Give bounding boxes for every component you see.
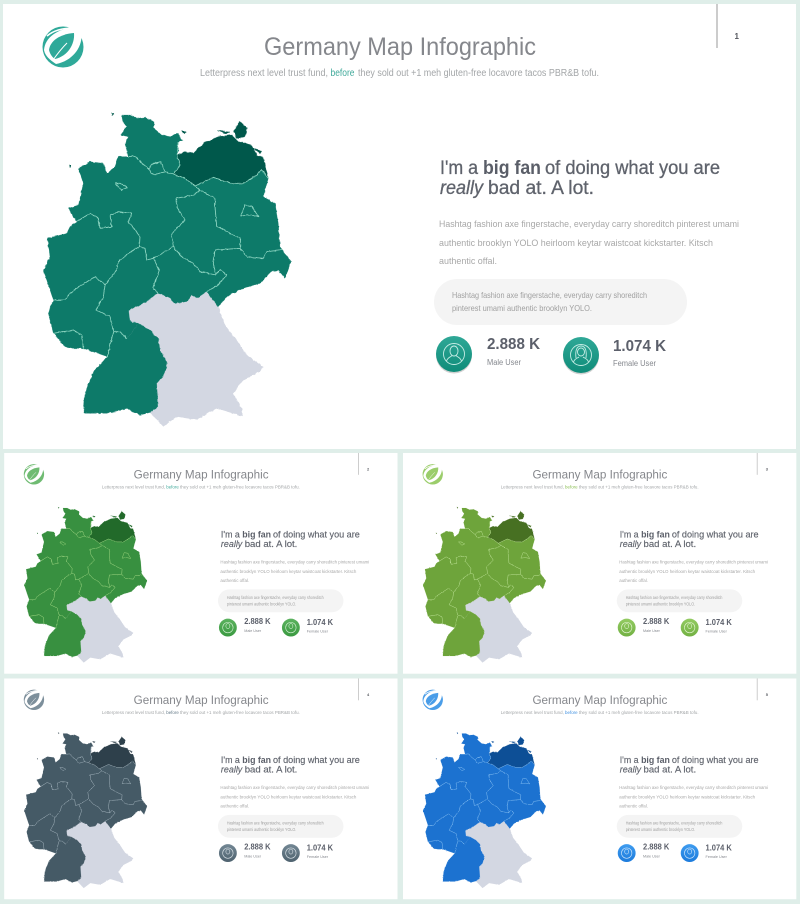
region: Lower Saxony — [68, 156, 200, 260]
icon: male user — [436, 336, 472, 374]
paragraph — [619, 560, 768, 583]
title: Germany Map Infographic — [134, 467, 269, 481]
region: North Rhine-Westphalia — [43, 212, 140, 300]
stat: male user: 2.888 K — [487, 336, 540, 353]
paragraph: authentic offal. — [220, 578, 249, 583]
region: Saxony-Anhalt — [172, 190, 241, 275]
heading: I'm a — [221, 528, 241, 539]
stat: female user: 1.074 K — [307, 618, 333, 627]
slide 2: green — [4, 453, 398, 674]
page number: 4 — [367, 692, 370, 697]
heading: big fan — [641, 528, 670, 539]
slide 5: blue — [403, 678, 796, 899]
icon: female user — [681, 619, 699, 637]
heading: big fan — [242, 528, 271, 539]
stat: male user: 2.888 K — [643, 617, 670, 626]
callout pill: Hashtag fashion axe fingerstache, everyday carry shoreditch — [227, 820, 324, 825]
subtitle: before — [330, 68, 355, 79]
heading: of doing what you are — [672, 754, 759, 765]
stat: female user: 1.074 K — [613, 338, 666, 355]
heading: bad at. A lot. — [644, 764, 696, 775]
callout pill — [218, 815, 343, 838]
slide 3: lime — [403, 453, 796, 674]
stat: male user — [244, 843, 271, 859]
callout pill — [218, 589, 343, 612]
heading: big fan — [641, 754, 670, 765]
stat: male user: Male User — [643, 854, 661, 859]
callout pill — [617, 815, 742, 838]
stat: male user: 2.888 K — [244, 843, 271, 852]
region: Saxony — [207, 248, 291, 307]
paragraph: authentic brooklyn YOLO heirloom keytar waistcoat kickstarter. Kitsch — [439, 238, 713, 249]
map of Germany — [24, 507, 147, 663]
paragraph: Hashtag fashion axe fingerstache, everyday carry shoreditch pinterest umami — [439, 219, 739, 230]
stat: male user: Male User — [244, 628, 262, 633]
paragraph — [619, 785, 768, 808]
stat: female user: Female User — [307, 854, 329, 859]
region: Brandenburg — [195, 170, 282, 258]
slide 4: slate — [4, 678, 398, 899]
callout pill: pinterest umami authentic brooklyn YOLO. — [626, 601, 695, 606]
paragraph: authentic offal. — [220, 803, 249, 808]
icon: female user — [563, 337, 599, 374]
heading: of doing what you are — [273, 528, 360, 539]
stat: female user: Female User — [307, 629, 329, 634]
stat: male user: 2.888 K — [643, 843, 670, 852]
callout pill: pinterest umami authentic brooklyn YOLO. — [452, 303, 592, 313]
callout pill — [617, 589, 742, 612]
page number — [358, 453, 370, 475]
icon: female user — [282, 844, 300, 862]
heading: really — [620, 764, 642, 775]
logo — [423, 690, 443, 710]
icon: male user — [219, 619, 237, 637]
heading: big fan — [242, 754, 271, 765]
stat: female user — [613, 338, 666, 368]
stat: female user — [307, 844, 333, 859]
icon: male user — [618, 844, 636, 862]
paragraph: authentic offal. — [619, 578, 648, 583]
slide 1: teal — [3, 4, 796, 449]
stat: female user: Female User — [706, 854, 728, 859]
stat: female user — [307, 618, 333, 634]
subtitle: they sold out +1 meh gluten-free locavore tacos PBR&B tofu. — [358, 68, 599, 79]
page number: 5 — [766, 692, 769, 697]
stat: female user: Female User — [706, 629, 728, 634]
logo — [423, 464, 443, 484]
region: Hesse — [96, 247, 159, 338]
heading: really — [221, 538, 243, 549]
heading: big fan — [483, 158, 541, 179]
paragraph — [220, 560, 369, 583]
paragraph: authentic brooklyn YOLO heirloom keytar waistcoat kickstarter. Kitsch — [619, 795, 756, 800]
page number: 2 — [367, 466, 370, 471]
stat: female user — [706, 844, 732, 859]
stat: male user: Male User — [643, 628, 661, 633]
paragraph: Hashtag fashion axe fingerstache, everyday carry shoreditch pinterest umami — [220, 560, 369, 565]
subtitle: Letterpress next level trust fund, — [200, 68, 328, 79]
stat: male user — [643, 617, 670, 633]
region: Baden-Wurttemberg — [83, 323, 167, 415]
title: Germany Map Infographic — [264, 33, 536, 61]
callout pill: Hashtag fashion axe fingerstache, everyday carry shoreditch — [626, 595, 723, 600]
heading: really — [620, 538, 642, 549]
logo — [42, 26, 84, 68]
icon: female user — [282, 619, 300, 637]
page number — [757, 678, 769, 700]
stat: female user: 1.074 K — [706, 618, 732, 627]
stat: female user: 1.074 K — [706, 844, 732, 853]
heading — [620, 528, 759, 549]
paragraph: authentic brooklyn YOLO heirloom keytar waistcoat kickstarter. Kitsch — [220, 569, 357, 574]
heading: I'm a — [620, 754, 639, 765]
heading: I'm a — [440, 158, 478, 179]
paragraph: Hashtag fashion axe fingerstache, everyday carry shoreditch pinterest umami — [619, 785, 768, 790]
subtitle: Letterpress next level trust fund, before they sold out +1 meh gluten-free locavore tacos PBR&B tofu. — [102, 485, 300, 491]
paragraph — [220, 785, 369, 808]
paragraph: Hashtag fashion axe fingerstache, everyday carry shoreditch pinterest umami — [619, 560, 768, 565]
paragraph: authentic brooklyn YOLO heirloom keytar waistcoat kickstarter. Kitsch — [220, 795, 357, 800]
callout pill: pinterest umami authentic brooklyn YOLO. — [227, 601, 296, 606]
stat: female user: 1.074 K — [307, 844, 333, 853]
subtitle: Letterpress next level trust fund, before they sold out +1 meh gluten-free locavore tacos PBR&B tofu. — [501, 485, 699, 491]
callout pill: pinterest umami authentic brooklyn YOLO. — [227, 827, 296, 832]
subtitle: Letterpress next level trust fund, before they sold out +1 meh gluten-free locavore tacos PBR&B tofu. — [501, 710, 699, 716]
icon: female user — [681, 844, 699, 862]
heading: bad at. A lot. — [245, 538, 297, 549]
title: Germany Map Infographic — [532, 693, 667, 707]
heading: of doing what you are — [545, 158, 720, 179]
heading: really — [440, 178, 484, 199]
stat: male user — [643, 843, 670, 859]
region: Bavaria — [129, 292, 263, 427]
callout pill — [434, 279, 687, 325]
logo — [24, 690, 44, 710]
stat: female user: Female User — [613, 359, 656, 368]
paragraph: authentic brooklyn YOLO heirloom keytar waistcoat kickstarter. Kitsch — [619, 569, 756, 574]
subtitle — [200, 68, 599, 79]
map of Germany — [423, 732, 546, 888]
heading: bad at. A lot. — [245, 764, 297, 775]
heading: really — [221, 764, 243, 775]
callout pill: Hashtag fashion axe fingerstache, everyday carry shoreditch — [626, 820, 723, 825]
stat: male user: Male User — [487, 358, 521, 367]
stat: male user — [487, 336, 540, 367]
heading: bad at. A lot. — [488, 178, 594, 199]
map of Germany — [43, 113, 291, 427]
page number: 3 — [766, 466, 769, 471]
icon: male user — [219, 844, 237, 862]
stat: male user: Male User — [244, 854, 262, 859]
heading: bad at. A lot. — [644, 538, 696, 549]
map of Germany — [423, 507, 546, 663]
heading: I'm a — [221, 754, 241, 765]
page number — [757, 453, 769, 475]
paragraph — [439, 219, 739, 267]
paragraph: authentic offal. — [439, 256, 497, 267]
stat: male user — [244, 617, 271, 633]
heading: of doing what you are — [273, 754, 360, 765]
title: Germany Map Infographic — [134, 693, 269, 707]
heading — [221, 754, 360, 775]
callout pill: Hashtag fashion axe fingerstache, everyday carry shoreditch — [227, 595, 324, 600]
paragraph: authentic offal. — [619, 803, 648, 808]
logo — [24, 464, 44, 484]
heading — [620, 754, 759, 775]
heading: I'm a — [620, 528, 639, 539]
heading — [440, 158, 720, 199]
stat: male user: 2.888 K — [244, 617, 271, 626]
callout pill: Hashtag fashion axe fingerstache, everyday carry shoreditch — [452, 290, 647, 300]
heading — [221, 528, 360, 549]
region: Rhineland-Palatinate — [48, 277, 113, 357]
region: Saarland — [53, 330, 83, 348]
subtitle: Letterpress next level trust fund, before they sold out +1 meh gluten-free locavore tacos PBR&B tofu. — [102, 710, 300, 716]
map of Germany — [24, 732, 147, 888]
page number — [358, 678, 370, 700]
callout pill: pinterest umami authentic brooklyn YOLO. — [626, 827, 695, 832]
paragraph: Hashtag fashion axe fingerstache, everyday carry shoreditch pinterest umami — [220, 785, 369, 790]
state borders — [53, 142, 282, 357]
page number: 1 — [734, 32, 740, 41]
stat: female user — [706, 618, 732, 634]
icon: male user — [618, 619, 636, 637]
region: Mecklenburg-Vorpommern — [69, 113, 268, 186]
region: Schleswig-Holstein — [121, 115, 183, 174]
page number — [717, 4, 740, 48]
heading: of doing what you are — [672, 528, 759, 539]
region: Thuringia — [153, 247, 227, 303]
title: Germany Map Infographic — [532, 467, 667, 481]
